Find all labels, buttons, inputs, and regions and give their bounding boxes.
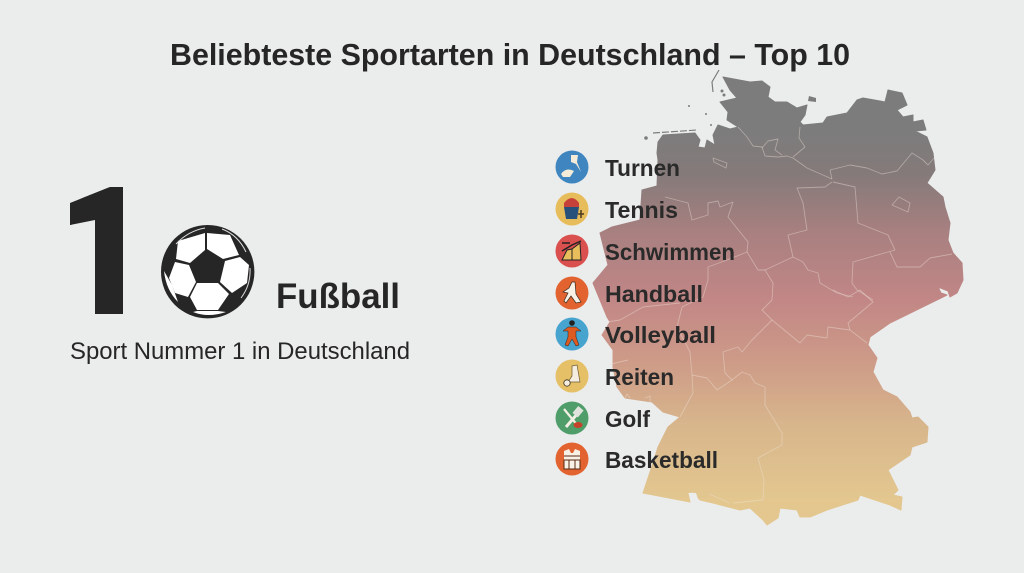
subtitle: Sport Nummer 1 in Deutschland bbox=[70, 338, 410, 365]
label: Fußball: Fußball bbox=[276, 277, 400, 316]
list row: Tennis bbox=[556, 192, 678, 226]
list row: Schwimmen bbox=[556, 234, 735, 268]
title: Beliebteste Sportarten in Deutschland – Top 10 bbox=[170, 37, 850, 72]
list row: Tennis: Tennis bbox=[605, 197, 678, 223]
map of Germany bbox=[593, 70, 963, 525]
list row: Golf: Golf bbox=[605, 406, 650, 432]
list row: Basketball bbox=[556, 442, 718, 476]
islands bbox=[644, 70, 816, 140]
icon: football bbox=[161, 225, 254, 318]
lake bbox=[688, 493, 698, 499]
list row: Basketball: Basketball bbox=[605, 447, 718, 473]
list row: Golf bbox=[556, 402, 650, 434]
list row: Reiten: Reiten bbox=[605, 364, 674, 390]
list row: Handball bbox=[556, 276, 703, 310]
list row: Reiten bbox=[556, 360, 674, 392]
state borders bbox=[607, 127, 952, 503]
list row: Turnen bbox=[556, 150, 680, 184]
list row: Schwimmen: Schwimmen bbox=[605, 239, 735, 265]
list row: Volleyball: Volleyball bbox=[605, 322, 716, 348]
list row: Handball: Handball bbox=[605, 281, 703, 307]
list row: Turnen: Turnen bbox=[605, 155, 680, 181]
map outline bbox=[593, 77, 963, 525]
list row: Volleyball bbox=[556, 318, 716, 350]
big number 1: 1 bbox=[54, 147, 156, 353]
